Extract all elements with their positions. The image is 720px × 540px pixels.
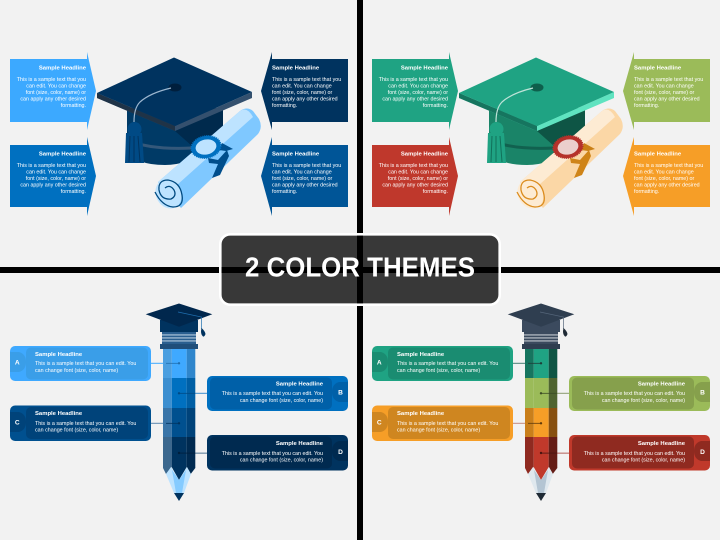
callout: top right green arrow: can edit. You can change — [634, 83, 694, 89]
callout: top right navy arrow: This is a sample text that you — [272, 77, 341, 83]
callout A teal: A — [377, 360, 382, 367]
icon: graduation cap — [97, 58, 252, 165]
callout: bottom right orange arrow: Sample Headline — [634, 152, 682, 158]
callout: top right navy arrow: Sample Headline — [272, 66, 320, 72]
callout: top left teal arrow: can apply any other desired — [382, 96, 448, 102]
callout: bottom right orange arrow: font (size, color, name) or — [634, 176, 695, 182]
callout: bottom left red arrow: can edit. You can change — [388, 169, 448, 175]
callout: top left teal arrow: Sample Headline — [401, 66, 449, 72]
callout B — [195, 376, 348, 411]
callout B green — [557, 376, 710, 411]
callout: top right green arrow: formatting. — [634, 103, 659, 109]
callout: top right green arrow: font (size, color, name) or — [634, 90, 695, 96]
callout A — [10, 346, 166, 381]
callout C orange: can change font (size, color, name) — [397, 428, 480, 434]
callout C orange — [372, 406, 528, 441]
panel: multicolor theme graduation cap infographic — [372, 52, 710, 216]
callout A: can change font (size, color, name) — [35, 368, 118, 374]
callout: top left teal arrow — [372, 52, 458, 130]
callout: bottom left blue arrow: can apply any other desired — [20, 182, 86, 188]
callout: bottom left blue arrow: can edit. You can change — [26, 169, 86, 175]
callout: bottom right dark blue arrow: font (size, color, name) or — [272, 176, 333, 182]
callout: top left light blue arrow — [10, 52, 96, 130]
callout D red: D — [700, 449, 705, 456]
callout: top left light blue arrow: This is a sample text that you — [17, 77, 86, 83]
callout C: C — [15, 420, 20, 426]
icon: multicolor pencil — [508, 304, 574, 501]
title badge: 2 color themes — [220, 234, 500, 305]
callout: top right green arrow — [623, 52, 710, 130]
callout: bottom left red arrow: can apply any other desired — [382, 182, 448, 188]
callout: bottom right orange arrow: This is a sample text that you — [634, 163, 703, 169]
callout: bottom left blue arrow — [10, 137, 96, 216]
callout: top left teal arrow: formatting. — [423, 103, 448, 109]
callout: bottom right dark blue arrow: Sample Headline — [272, 152, 320, 158]
callout D: can change font (size, color, name) — [240, 458, 323, 464]
callout: bottom left blue arrow: formatting. — [61, 189, 86, 195]
callout C orange: C — [377, 420, 382, 426]
callout B: Sample Headline — [276, 382, 324, 388]
callout C orange: This is a sample text that you can edit. You — [397, 421, 498, 427]
callout: bottom right dark blue arrow: formatting. — [272, 189, 297, 195]
callout: top left light blue arrow: can apply any other desired — [20, 96, 86, 102]
callout: bottom left blue arrow: font (size, color, name) or — [26, 176, 86, 182]
callout D red — [557, 435, 710, 470]
callout C: Sample Headline — [35, 411, 83, 417]
callout: top left light blue arrow: formatting. — [61, 103, 86, 109]
callout: top left teal arrow: can edit. You can change — [388, 83, 448, 89]
callout: top right navy arrow — [261, 52, 348, 130]
callout A: Sample Headline — [35, 352, 83, 358]
callout D: This is a sample text that you can edit. You — [222, 451, 323, 457]
title badge: 2 color themes: 2 COLOR THEMES — [245, 252, 475, 283]
panel: blue theme graduation cap infographic — [10, 52, 348, 216]
panel: blue theme pencil infographic — [10, 304, 348, 501]
callout: bottom left red arrow: Sample Headline — [401, 152, 449, 158]
callout: top right navy arrow: can edit. You can change — [272, 83, 332, 89]
callout: top left light blue arrow: Sample Headline — [39, 66, 87, 72]
callout A teal: This is a sample text that you can edit. You — [397, 361, 498, 367]
callout: bottom right orange arrow: can apply any other desired — [634, 182, 700, 188]
callout B green: can change font (size, color, name) — [602, 398, 685, 404]
callout: bottom left red arrow: formatting. — [423, 189, 448, 195]
callout B: This is a sample text that you can edit. You — [222, 391, 323, 397]
callout C orange: Sample Headline — [397, 411, 445, 417]
callout A: A — [15, 360, 20, 367]
callout: bottom right orange arrow — [623, 137, 710, 216]
icon: rolled diploma with seal — [150, 108, 261, 213]
callout: bottom left blue arrow: Sample Headline — [39, 152, 87, 158]
callout A: This is a sample text that you can edit. You — [35, 361, 136, 367]
callout: bottom right orange arrow: can edit. You can change — [634, 169, 694, 175]
callout: bottom right orange arrow: formatting. — [634, 189, 659, 195]
callout A teal: Sample Headline — [397, 352, 445, 358]
panel: multicolor theme pencil infographic — [372, 304, 710, 501]
callout: bottom left blue arrow: This is a sample text that you — [17, 163, 86, 169]
callout: top right navy arrow: font (size, color, name) or — [272, 90, 333, 96]
callout C — [10, 406, 166, 441]
callout D: Sample Headline — [276, 441, 324, 447]
callout: top left teal arrow: This is a sample text that you — [379, 77, 448, 83]
callout C: can change font (size, color, name) — [35, 428, 118, 434]
callout: top left teal arrow: font (size, color, name) or — [388, 90, 448, 96]
callout: top left light blue arrow: can edit. You can change — [26, 83, 86, 89]
callout: bottom right dark blue arrow: can apply any other desired — [272, 182, 338, 188]
callout: top right navy arrow: formatting. — [272, 103, 297, 109]
callout D red: Sample Headline — [638, 441, 686, 447]
callout: top right navy arrow: can apply any other desired — [272, 96, 338, 102]
callout: bottom right dark blue arrow — [261, 137, 348, 216]
callout B green: Sample Headline — [638, 382, 686, 388]
callout: bottom left red arrow — [372, 137, 458, 216]
callout: bottom left red arrow: font (size, color, name) or — [388, 176, 448, 182]
icon: pencil — [146, 304, 212, 501]
callout A teal: can change font (size, color, name) — [397, 368, 480, 374]
callout: top right green arrow: Sample Headline — [634, 66, 682, 72]
icon: cream diploma with red seal — [512, 108, 623, 213]
callout C: This is a sample text that you can edit. You — [35, 421, 136, 427]
callout: top left light blue arrow: font (size, color, name) or — [26, 90, 86, 96]
callout D: D — [338, 449, 343, 456]
callout B green: B — [700, 390, 705, 396]
callout: top right green arrow: This is a sample text that you — [634, 77, 703, 83]
callout D — [195, 435, 348, 470]
callout: bottom left red arrow: This is a sample text that you — [379, 163, 448, 169]
callout B: can change font (size, color, name) — [240, 398, 323, 404]
callout: bottom right dark blue arrow: This is a sample text that you — [272, 163, 341, 169]
callout B green: This is a sample text that you can edit. You — [584, 391, 685, 397]
callout D red: This is a sample text that you can edit. You — [584, 451, 685, 457]
callout: bottom right dark blue arrow: can edit. You can change — [272, 169, 332, 175]
callout: top right green arrow: can apply any other desired — [634, 96, 700, 102]
callout A teal — [372, 346, 528, 381]
icon: teal graduation cap — [459, 58, 614, 165]
callout D red: can change font (size, color, name) — [602, 458, 685, 464]
callout B: B — [338, 390, 343, 396]
